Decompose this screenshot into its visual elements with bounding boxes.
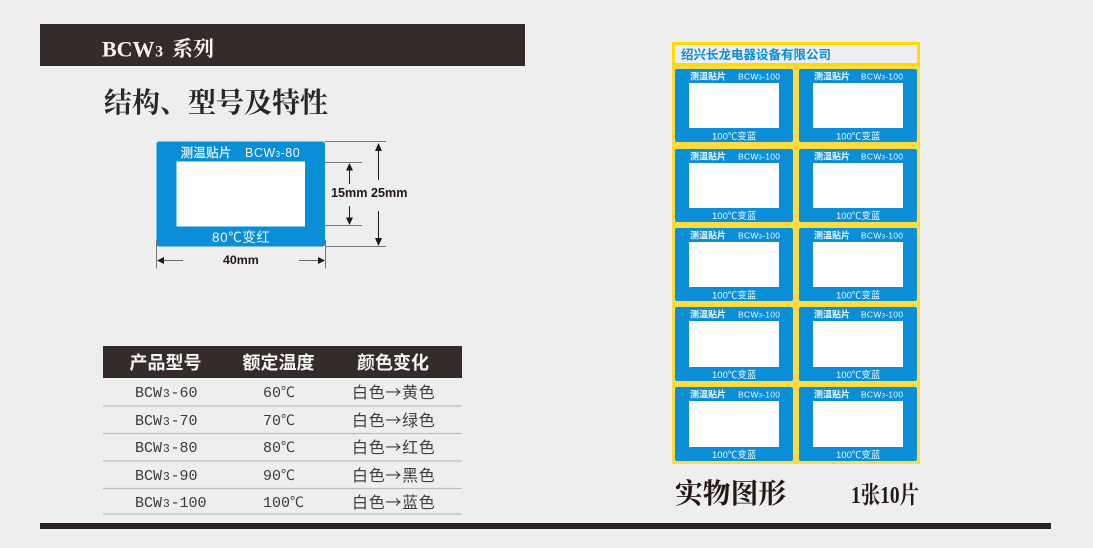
row BCW3-60: 白色→黄色 — [352, 379, 436, 403]
dimension: 25mm: 25mm — [371, 186, 407, 200]
card row 5 right: 测温贴片 — [814, 388, 850, 400]
card row 3 right: 测温贴片 — [814, 228, 850, 242]
row BCW3-100: 白色→蓝色 — [352, 489, 436, 513]
card row 1 left: BCW3-100 — [738, 72, 780, 82]
row BCW3-70 — [135, 407, 436, 431]
table header — [103, 346, 462, 378]
card row 2 right: 测温贴片 — [814, 150, 850, 162]
card row 5 left: BCW3-100 — [738, 390, 780, 400]
header band: BCW3 系列: 系列 — [172, 33, 214, 63]
row BCW3-90: 90 — [263, 468, 281, 485]
card row 5 left: 100℃变蓝 — [712, 449, 757, 461]
card row 4 left: 测温贴片 — [690, 308, 726, 320]
card row 4 left: BCW3-100 — [738, 310, 780, 320]
label window — [176, 162, 305, 226]
company banner — [674, 44, 918, 64]
card row 2 left — [675, 149, 793, 222]
label body — [156, 142, 325, 246]
card row 3 left: 测温贴片 — [690, 228, 726, 242]
footer bar — [40, 523, 1051, 529]
row BCW3-80: BCW3-80 — [135, 440, 198, 457]
card row 5 right: BCW3-100 — [861, 390, 903, 400]
row BCW3-70: 白色→绿色 — [352, 407, 436, 431]
card row 5 left — [675, 387, 793, 461]
label sheet — [672, 42, 920, 464]
dimension: 15mm: 15mm — [331, 186, 367, 200]
row BCW3-80 — [135, 434, 436, 458]
row BCW3-60: ℃ — [281, 382, 295, 402]
card row 1 right: BCW3-100 — [861, 72, 903, 82]
row BCW3-70: BCW3-70 — [135, 413, 198, 430]
diagram: label structure with dimensions — [156, 142, 407, 268]
card row 4 right: BCW3-100 — [861, 310, 903, 320]
section heading: 结构、型号及特性 — [104, 81, 328, 121]
dimension lines — [156, 142, 386, 268]
card row 3 left: BCW3-100 — [738, 230, 780, 240]
card row 5 right — [799, 387, 917, 461]
card row 4 left — [675, 307, 793, 381]
card row 3 left — [675, 228, 793, 302]
card row 4 right: 测温贴片 — [814, 308, 850, 320]
card row 2 right — [799, 149, 917, 222]
row BCW3-70: ℃ — [281, 410, 295, 430]
dimension: 40mm: 40mm — [223, 253, 259, 267]
table header: 额定温度 — [242, 349, 314, 375]
arrow: 25mm — [375, 143, 382, 246]
card row 3 right — [799, 228, 917, 302]
card row 2 left: BCW3-100 — [738, 152, 780, 162]
label top text — [180, 142, 300, 161]
row BCW3-100: 100 — [263, 495, 290, 512]
card row 5 right: 100℃变蓝 — [836, 449, 881, 461]
card row 1 left: 测温贴片 — [690, 70, 726, 82]
company banner: 绍兴长龙电器设备有限公司 — [681, 44, 831, 63]
card row 4 right: 100℃变蓝 — [836, 369, 881, 381]
label top text: 测温贴片 — [180, 142, 232, 161]
row BCW3-90: 白色→黑色 — [352, 462, 436, 486]
card row 2 right: 100℃变蓝 — [836, 210, 881, 222]
header band: BCW3 系列: BCW3 — [102, 36, 163, 62]
card row 3 left: 100℃变蓝 — [712, 290, 757, 302]
card row 4 left: 100℃变蓝 — [712, 369, 757, 381]
row BCW3-90: ℃ — [281, 465, 295, 485]
row BCW3-80: 80 — [263, 440, 281, 457]
label bottom text: 80℃变红 — [212, 230, 271, 245]
caption: 实物图形: 实物图形 — [675, 471, 786, 511]
card row 1 left — [675, 69, 793, 142]
header band: BCW3 系列 — [40, 24, 525, 66]
row BCW3-100 — [135, 489, 436, 513]
card row 1 right: 测温贴片 — [814, 70, 850, 82]
card row 1 right — [799, 69, 917, 142]
table header: 颜色变化 — [357, 349, 429, 375]
row BCW3-90: BCW3-90 — [135, 468, 198, 485]
row BCW3-100: BCW3-100 — [135, 495, 207, 512]
table header: 产品型号 — [130, 349, 202, 375]
row BCW3-70: 70 — [263, 413, 281, 430]
arrow: 40mm — [157, 257, 325, 264]
row BCW3-80: 白色→红色 — [352, 434, 436, 458]
sheet backing — [672, 42, 920, 464]
card row 2 left: 测温贴片 — [690, 150, 726, 162]
row BCW3-60: BCW3-60 — [135, 385, 198, 402]
row BCW3-60 — [135, 379, 436, 403]
card row 2 left: 100℃变蓝 — [712, 210, 757, 222]
row BCW3-90 — [135, 462, 436, 486]
label top text: BCW3-80 — [245, 146, 300, 160]
specification table — [103, 346, 462, 514]
arrow: 15mm — [346, 163, 353, 225]
card row 5 left: 测温贴片 — [690, 388, 726, 400]
row BCW3-60: 60 — [263, 385, 281, 402]
card row 2 right: BCW3-100 — [861, 152, 903, 162]
row BCW3-80: ℃ — [281, 437, 295, 457]
card row 1 right: 100℃变蓝 — [836, 130, 881, 142]
card row 3 right: 100℃变蓝 — [836, 290, 881, 302]
caption: 1张10片: 1张10片 — [851, 475, 919, 510]
row BCW3-100: ℃ — [290, 492, 304, 512]
card row 3 right: BCW3-100 — [861, 230, 903, 240]
card row 4 right — [799, 307, 917, 381]
card row 1 left: 100℃变蓝 — [712, 130, 757, 142]
